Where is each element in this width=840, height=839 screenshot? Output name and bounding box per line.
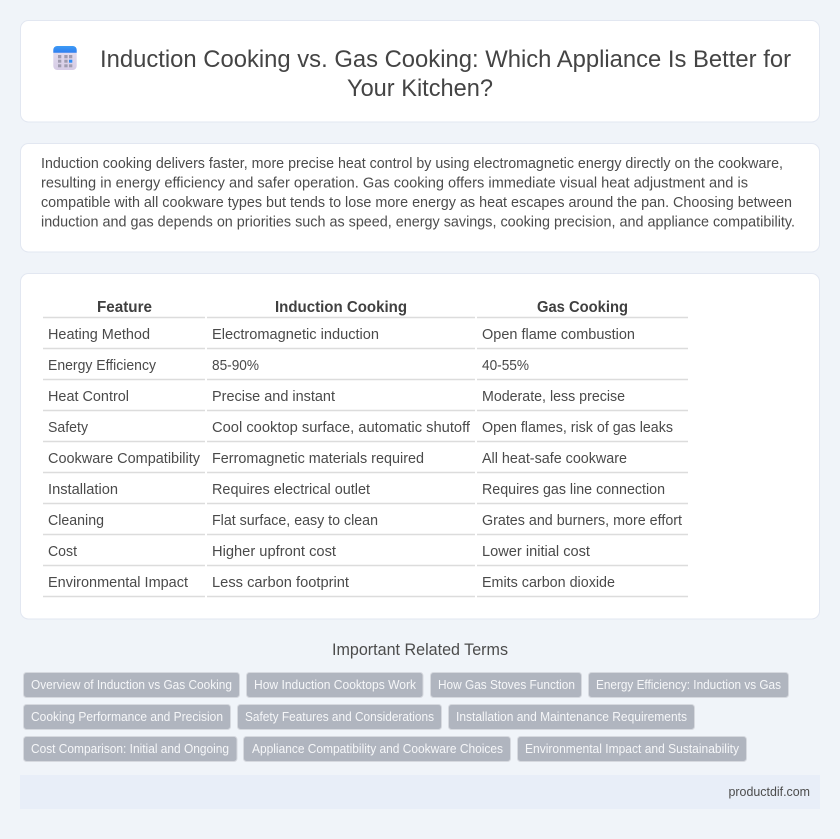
row: safety (43, 420, 688, 442)
row: energy efficiency: 40-55% (482, 358, 529, 374)
tag (24, 704, 230, 730)
tag (448, 704, 694, 730)
row: environmental impact (43, 575, 688, 596)
tag: Appliance Compatibility and Cookware Choices (252, 741, 503, 756)
row: safety: Safety (48, 420, 89, 436)
table header row: Gas Cooking (537, 299, 628, 316)
row: environmental impact: Less carbon footprint (212, 575, 349, 591)
tag: Cost Comparison: Initial and Ongoing (31, 741, 229, 756)
row: installation: Installation (48, 482, 118, 498)
footer (20, 775, 820, 809)
table header row: Induction Cooking (275, 299, 407, 316)
tags: related terms (24, 672, 788, 762)
tag (246, 672, 423, 698)
row: heat control: Heat Control (48, 389, 129, 405)
row: installation: Requires electrical outlet (212, 482, 370, 498)
heading: important related terms: Important Related Terms (332, 641, 508, 659)
row: heating method: Electromagnetic induction (212, 327, 379, 343)
panel: introduction (20, 144, 820, 252)
tag: Environmental Impact and Sustainability (525, 741, 740, 756)
row: cost (43, 544, 688, 566)
row: installation (43, 482, 688, 504)
row: installation: Requires gas line connection (482, 482, 665, 498)
row: heating method: Open flame combustion (482, 327, 635, 343)
row: environmental impact: Emits carbon dioxide (482, 575, 615, 591)
tag: How Induction Cooktops Work (254, 677, 417, 692)
row: environmental impact: Environmental Impact (48, 575, 188, 591)
row: cleaning: Cleaning (48, 513, 104, 529)
tag (430, 672, 582, 698)
intro text: resulting in energy efficiency and safer operation. Gas cooking offers immediate visual heat adjustment and is (41, 174, 748, 192)
panel: header (20, 20, 820, 122)
row: cleaning (43, 513, 688, 534)
row: cookware compatibility: Ferromagnetic materials required (212, 451, 424, 467)
row: cleaning: Flat surface, easy to clean (212, 513, 378, 529)
row: energy efficiency: 85-90% (212, 358, 259, 374)
row: heat control (43, 389, 688, 410)
tag: How Gas Stoves Function (438, 677, 575, 692)
row: cookware compatibility: Cookware Compatibility (48, 451, 201, 467)
row: cleaning: Grates and burners, more effort (482, 513, 682, 529)
row: heat control: Moderate, less precise (482, 389, 625, 405)
title: Your Kitchen? (347, 75, 493, 102)
icon: calendar (53, 46, 77, 70)
row: heating method (43, 327, 688, 348)
row: cost: Higher upfront cost (212, 544, 336, 560)
row: cookware compatibility (43, 451, 688, 472)
tag: Energy Efficiency: Induction vs Gas (596, 677, 781, 692)
row: cookware compatibility: All heat-safe cookware (482, 451, 627, 467)
row: energy efficiency: Energy Efficiency (48, 358, 157, 374)
intro text: induction and gas depends on priorities such as speed, energy savings, cooking precision, and appliance compatibility. (41, 214, 795, 230)
footer source: productdif.com (728, 784, 810, 799)
tag (588, 672, 788, 698)
row: safety: Cool cooktop surface, automatic shutoff (212, 420, 471, 436)
table header row (43, 299, 688, 318)
tag: Installation and Maintenance Requirements (456, 709, 687, 724)
intro text: Induction cooking delivers faster, more precise heat control by using electromagnetic energy directly on the cookware, (41, 155, 783, 172)
tag (238, 704, 442, 730)
intro text: compatible with all cookware types but tends to lose more energy as heat escapes around the pan. Choosing between (41, 194, 792, 211)
tag: Overview of Induction vs Gas Cooking (31, 677, 232, 692)
tag: Safety Features and Considerations (245, 709, 434, 724)
row: energy efficiency (43, 358, 688, 380)
row: heating method: Heating Method (48, 327, 150, 343)
row: cost: Lower initial cost (482, 544, 590, 560)
row: safety: Open flames, risk of gas leaks (482, 420, 673, 436)
table header row: Feature (97, 299, 152, 316)
row: heat control: Precise and instant (212, 389, 335, 405)
tag (24, 672, 240, 698)
tag: Cooking Performance and Precision (31, 709, 223, 724)
tag (244, 736, 510, 762)
title: Induction Cooking vs. Gas Cooking: Which Appliance Is Better for (100, 46, 791, 73)
row: cost: Cost (48, 544, 77, 560)
tag (24, 736, 237, 762)
tag (518, 736, 746, 762)
panel: comparison table (20, 274, 820, 619)
